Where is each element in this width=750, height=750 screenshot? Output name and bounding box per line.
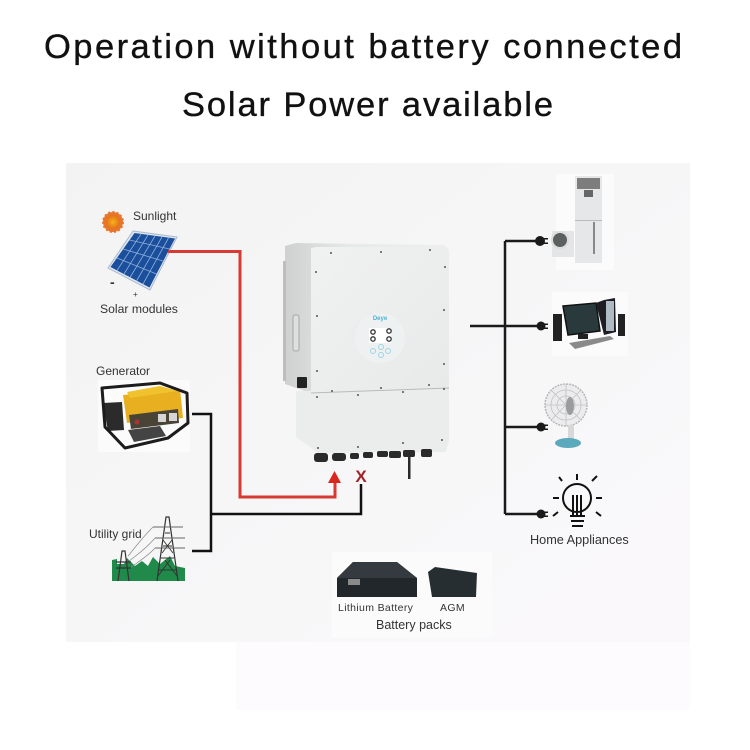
icon: plugs bbox=[535, 236, 548, 518]
icon: computer bbox=[552, 292, 628, 356]
wire: solar to inverter bbox=[168, 252, 335, 497]
subtitle: Solar Power available bbox=[182, 86, 553, 124]
label: minus: - bbox=[110, 274, 115, 290]
inverter handle bbox=[293, 315, 299, 351]
title: Operation without battery connected bbox=[44, 28, 682, 66]
label: AGM: AGM bbox=[440, 602, 465, 614]
label: battery packs: Battery packs bbox=[376, 618, 452, 632]
label: solar modules: Solar modules bbox=[100, 302, 178, 316]
inverter side switch bbox=[297, 377, 307, 388]
icon: utility grid bbox=[112, 517, 185, 581]
inverter bbox=[283, 243, 449, 479]
icon: air conditioner and washer bbox=[552, 174, 614, 270]
inverter cable glands bbox=[314, 449, 432, 479]
label: sunlight: Sunlight bbox=[133, 209, 177, 223]
icon: light bulb bbox=[553, 474, 602, 526]
icon: generator bbox=[98, 380, 190, 452]
label: generator: Generator bbox=[96, 364, 150, 378]
icon: lithium battery bbox=[337, 562, 417, 597]
label: home appliances: Home Appliances bbox=[530, 533, 629, 547]
icon: AGM battery bbox=[428, 567, 477, 597]
marker: battery disconnected X: X bbox=[355, 467, 367, 486]
arrow: solar input bbox=[328, 471, 341, 483]
label: lithium battery: Lithium Battery bbox=[338, 602, 414, 614]
wire: generator and grid bracket bbox=[192, 414, 361, 551]
label: utility grid: Utility grid bbox=[89, 527, 142, 541]
inverter display: Deye bbox=[373, 316, 388, 322]
label: plus: + bbox=[133, 290, 138, 299]
inverter display bbox=[355, 313, 405, 363]
icon: sun bbox=[103, 212, 123, 232]
icon: solar modules bbox=[108, 231, 177, 290]
background panel bbox=[66, 163, 690, 642]
inverter screws bbox=[315, 249, 446, 449]
icon: fan bbox=[545, 384, 587, 448]
wire: output bus bbox=[470, 241, 537, 514]
